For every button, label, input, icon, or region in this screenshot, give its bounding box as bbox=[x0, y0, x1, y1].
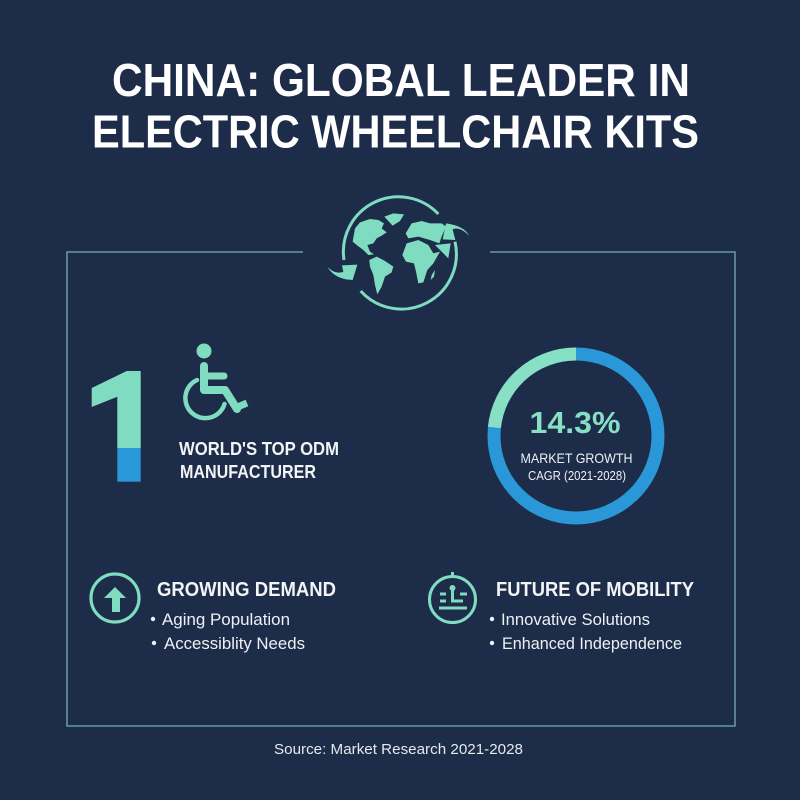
block: growing demand: Aging Population bbox=[162, 611, 290, 629]
icon: up arrow bbox=[91, 574, 139, 622]
icon: wheelchair bbox=[185, 344, 247, 418]
block: growing demand bbox=[151, 579, 336, 653]
title: CHINA: GLOBAL LEADER IN bbox=[112, 54, 690, 106]
text: top ODM manufacturer: MANUFACTURER bbox=[180, 462, 316, 482]
donut label: CAGR (2021-2028) bbox=[528, 468, 626, 483]
block: future of mobility: Enhanced Independence bbox=[502, 635, 682, 653]
title bbox=[92, 54, 699, 158]
icon: clock with lines bbox=[430, 572, 476, 622]
source note: Source: Market Research 2021-2028 bbox=[274, 741, 523, 758]
big number 1 bbox=[92, 371, 141, 482]
text: top ODM manufacturer: WORLD'S TOP ODM bbox=[179, 439, 339, 459]
block: future of mobility: FUTURE OF MOBILITY bbox=[496, 579, 695, 601]
donut label bbox=[520, 450, 632, 483]
title: ELECTRIC WHEELCHAIR KITS bbox=[92, 106, 699, 158]
block: growing demand: Accessiblity Needs bbox=[164, 635, 305, 653]
donut chart: market growth bbox=[494, 354, 658, 518]
block: growing demand: GROWING DEMAND bbox=[157, 579, 336, 601]
block: future of mobility: Innovative Solutions bbox=[501, 611, 650, 629]
icon: globe with arrows bbox=[327, 197, 469, 309]
donut label: MARKET GROWTH bbox=[520, 450, 632, 466]
text: top ODM manufacturer bbox=[179, 439, 339, 482]
panel frame bbox=[67, 252, 735, 726]
block: future of mobility bbox=[490, 579, 695, 653]
donut value: 14.3% bbox=[530, 405, 620, 440]
